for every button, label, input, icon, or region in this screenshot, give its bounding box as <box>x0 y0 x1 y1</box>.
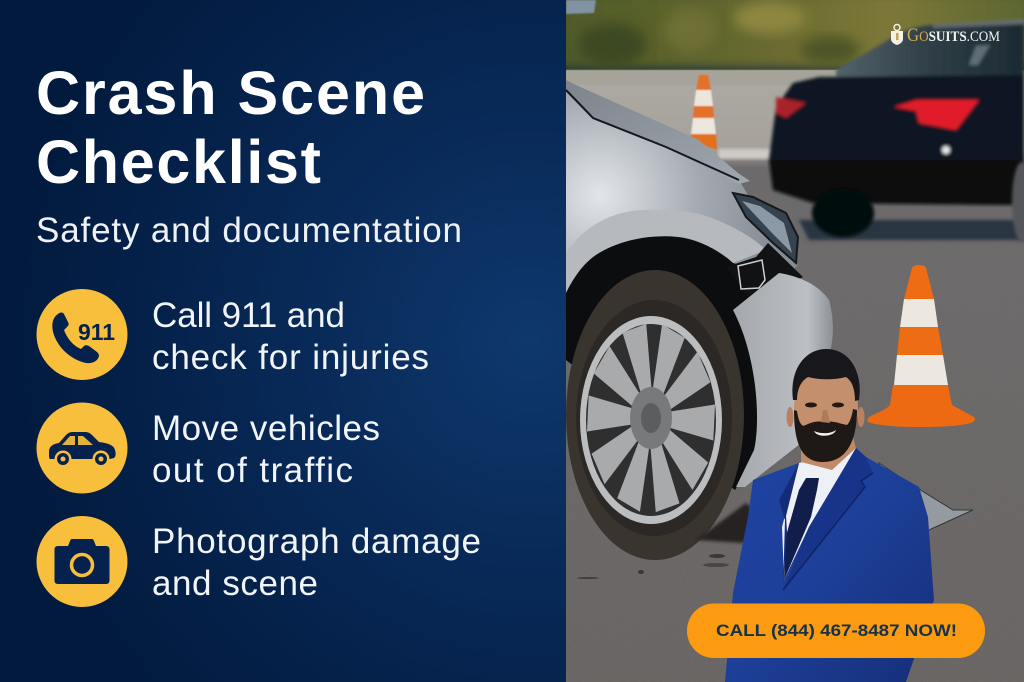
background trees <box>556 0 1024 70</box>
road <box>566 70 1024 682</box>
text: move vehicles <box>152 409 380 490</box>
text: call 911 <box>152 296 429 377</box>
icon: phone 911 <box>36 289 128 380</box>
CTA button <box>687 604 985 658</box>
text: photograph <box>152 522 481 603</box>
big cone <box>867 265 975 427</box>
black car <box>769 19 1024 205</box>
text: photograph: and scene <box>152 564 318 603</box>
small cone <box>691 75 717 150</box>
silver car body <box>566 80 833 490</box>
text: call 911: check for injuries <box>152 338 429 377</box>
title: Checklist <box>36 128 321 196</box>
logo: GoSuits.com: GOSUITS.COM <box>907 25 1000 46</box>
checklist item: call 911 <box>36 289 429 380</box>
guard rail <box>566 69 839 76</box>
shadow under black car <box>799 220 1024 240</box>
checklist item: move vehicles <box>36 402 380 494</box>
title: Crash Scene <box>36 59 425 127</box>
icon: camera <box>36 516 128 607</box>
broken bumper piece <box>879 463 973 530</box>
text: move vehicles: Move vehicles <box>152 409 380 448</box>
wheel shadow and debris <box>577 503 758 579</box>
checklist item: photograph <box>36 516 481 607</box>
front wheel <box>566 270 744 560</box>
text: photograph: Photograph damage <box>152 522 481 561</box>
black car wheels <box>812 162 1024 242</box>
CTA button: CALL (844) 467-8487 NOW! <box>716 622 957 640</box>
icon: phone 911: 911 <box>78 319 115 345</box>
panel: crash scene photo <box>556 0 1024 682</box>
attorney portrait <box>725 349 934 682</box>
subtitle: Safety and documentation <box>36 211 462 250</box>
icon: car <box>36 402 128 494</box>
panel: checklist background <box>0 0 566 682</box>
text: move vehicles: out of traffic <box>152 451 353 490</box>
title <box>36 59 425 196</box>
text: call 911: Call 911 and <box>152 296 345 335</box>
